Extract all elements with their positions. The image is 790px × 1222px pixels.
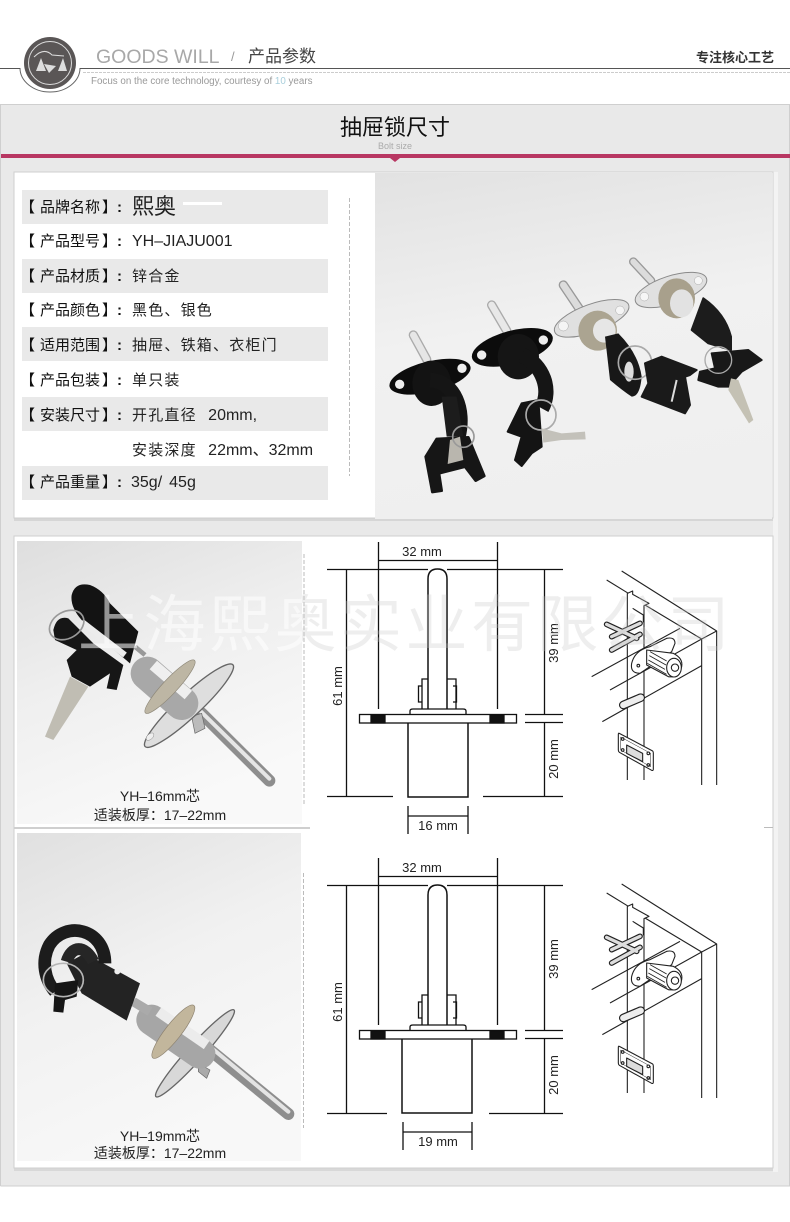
pink divider with pointer [1,154,790,162]
brand heading: GOODS WILL [96,46,220,68]
caption: YH-16mm: 适装板厚：17–22mm [94,807,226,823]
parameter table: 开孔直径 20mm, [132,407,257,424]
dimension drawing: 16mm core: 20 mm [546,739,561,779]
parameter table: 】 [102,407,117,424]
parameter table: 】 [102,337,117,354]
watermark: 上海熙奥实业有限公司 [78,591,733,660]
dimension drawing: 16mm core [327,542,563,834]
parameter table: : [117,372,122,389]
parameter table: 】 [102,233,117,250]
parameter table: 【 [20,268,35,285]
parameter table: 安装深度 22mm、32mm [132,442,313,459]
parameter table: 【 [20,302,35,319]
parameter table: : [117,233,122,250]
dimension drawing: 19mm core: 39 mm [546,939,561,979]
top right slogan: 专注核心工艺 [696,50,774,65]
panel: parameters [14,172,773,521]
parameter table: 【 [20,337,35,354]
parameter table: 】 [102,302,117,319]
watermark: 上海熙奥实业有限公司 [78,591,733,660]
subtitle: Bolt size [378,141,412,151]
dimension drawing: 19mm core [327,858,563,1150]
parameter table: 产品型号 [40,233,100,250]
caption: YH-16mm: YH–16mm芯 [120,788,200,804]
caption: YH-19mm: 适装板厚：17–22mm [94,1145,226,1161]
lock 1 black [413,335,427,359]
dimension drawing: 16mm core: 16 mm [418,818,458,833]
photo: YH-19mm lock [17,833,301,1161]
parameter table: : [117,302,122,319]
parameter table: 【 [20,474,35,491]
parameter table: 抽屉、铁箱、衣柜门 [132,337,278,354]
section name: 产品参数 [248,47,316,66]
installation drawing: 16mm [592,571,717,785]
caption: YH-19mm: YH–19mm芯 [120,1128,200,1144]
parameter table: 锌合金 [132,268,181,285]
parameter table: 【 [20,233,35,250]
lock 4 chrome [633,262,651,281]
dimension drawing: 19mm core: 61 mm [330,982,345,1022]
logo badge [20,37,80,92]
parameter table: 产品材质 [40,268,100,285]
parameter table: 安装尺寸 [40,407,100,424]
parameter table: 【 [20,372,35,389]
tagline: Focus on the core technology, courtesy of 10 years [91,76,313,87]
caption: YH-16mm [94,788,226,823]
dimension drawing: 19mm core: 32 mm [402,860,442,875]
parameter table: 【 [20,407,35,424]
dimension drawing: 16mm core: 32 mm [402,544,442,559]
parameter table: 品牌名称 [40,199,100,216]
parameter table: 【 [20,199,35,216]
photo: four drawer locks [375,173,772,519]
parameter table: 】 [102,474,117,491]
parameter table: YH–JIAJU001 [132,233,233,250]
parameter table: : [117,199,122,216]
parameter table: : [117,474,122,491]
parameter table: 单只装 [132,372,181,389]
dimension drawing: 16mm core: 61 mm [330,666,345,706]
photo: YH-16mm lock [17,541,302,824]
parameter table: : [117,268,122,285]
parameter table: 35g/ 45g [131,474,196,491]
parameter table: : [117,337,122,354]
parameter table: 熙奥 [132,194,176,219]
caption: YH-19mm [94,1128,226,1161]
lock 2 black [492,305,507,331]
parameter table: 】 [102,372,117,389]
title: 抽屉锁尺寸 [340,115,450,140]
lock 3 chrome [563,285,579,308]
dimension drawing: 19mm core: 19 mm [418,1134,458,1149]
dimension drawing: 19mm core: 20 mm [546,1055,561,1095]
slash separator: / [231,49,235,64]
parameter table: 产品包装 [40,372,100,389]
header rules [0,68,790,72]
parameter table: 黑色、银色 [132,302,213,319]
parameter table [20,190,328,500]
dimension drawing: 16mm core: 39 mm [546,623,561,663]
panel: size diagrams [14,536,773,1171]
parameter table: 产品颜色 [40,302,100,319]
installation drawing: 19mm [592,884,717,1098]
parameter table: 产品重量 [40,474,100,491]
parameter table: 】 [102,199,117,216]
parameter table: 适用范围 [40,337,100,354]
parameter table: : [117,407,122,424]
parameter table: 】 [102,268,117,285]
